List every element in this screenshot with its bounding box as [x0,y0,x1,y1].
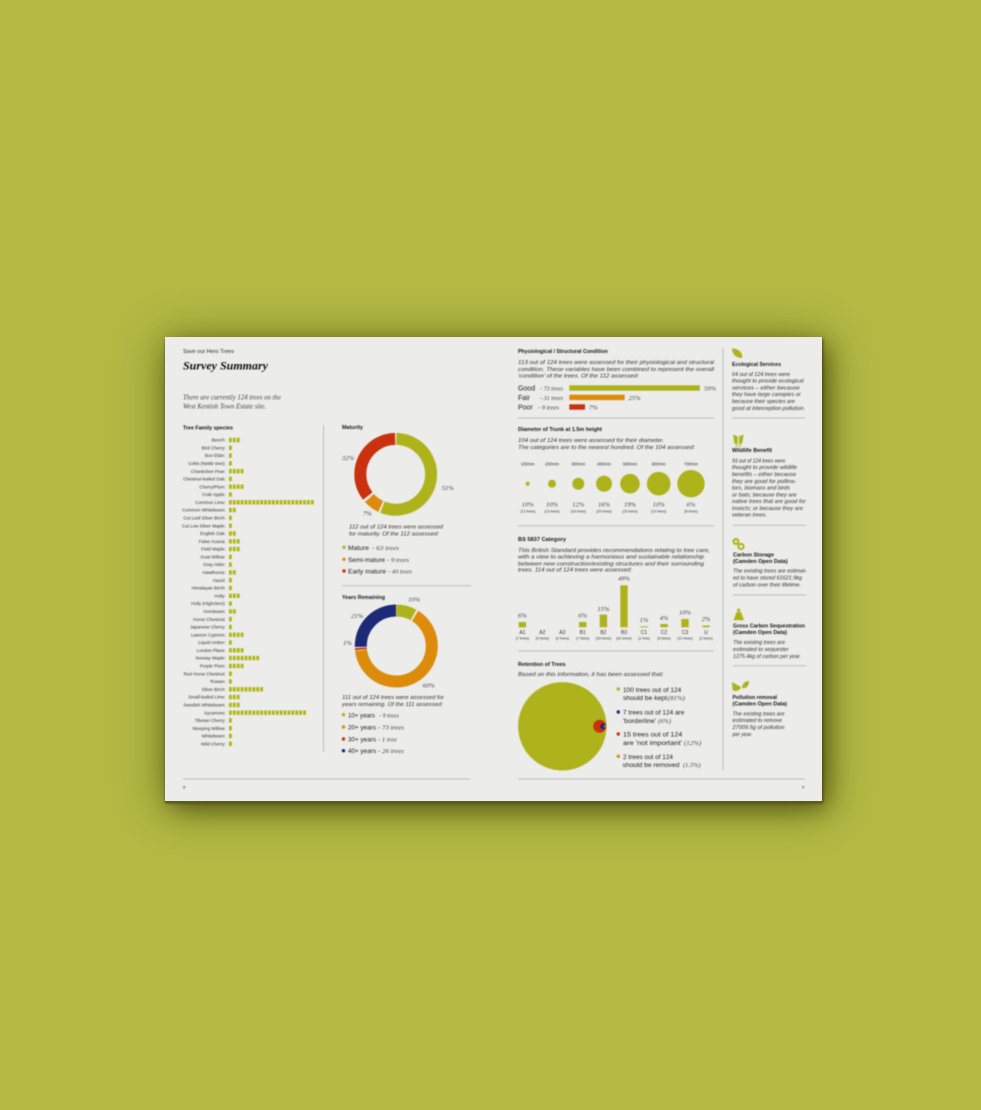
page number 9: 9 [802,784,805,790]
heading: Physiological / Structural Condition [518,349,608,355]
retention legend: should be kept [623,695,667,702]
species labels: Hornbeam: [203,609,226,614]
donut chart: maturity [360,439,431,510]
column chart: C1 [641,630,647,636]
years legend: - 9 trees [379,712,399,720]
kicker: Save our Hero Trees: Save our Hero Trees [183,349,234,355]
percentage labels: 7% [363,510,372,517]
column chart: B3 [621,630,627,636]
body text: they have large canopies or [732,392,801,398]
species labels: Sycamore: [204,710,226,715]
species labels: Hazel: [213,578,226,583]
maturity legend: - 63 trees [372,545,400,552]
sidebar: wildlife benefit [732,434,806,519]
column chart: (7 trees) [516,636,529,640]
species labels: Common Lime: [195,500,226,505]
panel: trunk diameter [518,427,705,514]
percentage labels: 32% [341,455,355,462]
years note: years remaining. Of the 111 assessed: [341,702,444,708]
bubble chart: 300mm [571,462,586,466]
panel: physiological condition [518,349,717,412]
column chart: 2% [702,616,711,623]
species labels: Celtis (Nettle tree): [188,461,226,466]
heading [732,695,787,708]
heading: Maturity: Maturity [342,425,363,431]
species labels: Crab Apple: [202,492,226,497]
percentage labels [341,455,454,517]
heading: Pollution removal [732,695,778,701]
maturity note: for maturity. Of the 112 assessed: [349,532,440,538]
page panel with drop shadow [164,337,822,801]
species labels [182,438,226,746]
species labels: Small-leafed Lime: [188,695,226,700]
column chart: 6% [578,613,588,620]
diameter note: 104 out of 124 trees were assessed for their diameter. [518,438,664,444]
percentage labels [343,596,435,690]
bubble chart: 200mm [545,462,559,466]
maturity note: 112 out of 124 trees were assessed [349,524,444,530]
column chart: (61 trees) [616,636,632,640]
icon: leaves and particles [732,681,749,691]
years legend: 10+ years [348,712,375,720]
column chart: (5 trees) [657,636,671,640]
condition bar chart: - 31 trees [540,395,563,402]
column chart: C3 [682,630,688,636]
maturity legend: Early mature [348,569,387,576]
heading: Years Remaining: Years Remaining [342,595,385,601]
body text: 1275.4kg of carbon per year. [733,654,801,660]
column chart: A3 [559,630,566,636]
column chart: (7 trees) [576,636,589,640]
body text: because their species are [732,399,795,405]
bubble chart: 19% [624,501,637,508]
percentage labels: 10% [408,596,421,604]
icon: leaf [732,348,742,358]
retention legend: are 'not important' [623,740,682,747]
column chart: (1 tree) [638,636,650,640]
body text: thought to provide wildlife [732,465,797,471]
maturity note [349,524,444,538]
species labels: Swedish Whitebeam: [183,702,226,708]
body text: veteran trees. [732,513,767,519]
bubble chart: (23 trees) [622,510,638,514]
column chart: A1 [519,630,526,636]
condition bar chart: - 9 trees [538,405,560,412]
condition bar chart: 59% [704,385,717,392]
heading: Retention of Trees [518,662,566,668]
column chart: U [704,630,708,636]
icon: weight [734,608,744,620]
bubble chart: 400mm [597,462,611,466]
BS note: between new construction/existing structures and their surrounding [518,561,704,567]
column chart: 49% [618,576,631,583]
retention legend: (81%) [668,695,685,702]
bubble chart: 600mm [652,462,666,466]
sidebar: pollution removal [731,681,787,738]
bubble chart: (12 trees) [520,510,535,514]
column chart: (0 trees) [536,636,549,640]
bubble chart: (20 trees) [596,510,612,514]
sidebar: ecological services [732,348,805,412]
maturity legend: - 40 trees [388,569,413,576]
years legend: 30+ years [348,736,376,744]
heading: Gross Carbon Sequestration [733,624,805,630]
heading: (Camden Open Data) [733,559,788,565]
BS note: This British Standard provides recommendations relating to tree care, [518,548,710,554]
species labels: Box Elder: [205,453,226,458]
column chart: 4% [660,615,669,622]
column chart: (16 trees) [596,636,611,640]
retention legend: 100 trees out of 124 [623,687,682,694]
heading [733,552,788,565]
species labels: Tibetan Cherry: [195,718,226,723]
heading: Tree Family species: Tree Family species [183,426,233,432]
condition bar chart: - 73 trees [540,385,563,392]
body text: or bats; because they are [732,492,797,498]
species labels: Silver Birch: [202,687,226,692]
percentage labels: 60% [423,682,435,690]
column chart: (12 trees) [677,636,693,640]
panel: maturity [341,425,454,576]
body text: 27009.5g of pollution [731,725,785,731]
body text: thought to provide ecological [732,379,805,385]
bubble chart: 10% [653,501,665,508]
species labels: Common Whitebeam: [182,508,226,513]
condition bar chart: 7% [589,405,598,412]
column chart: 6% [518,613,527,620]
condition note: condition. These variables have been combined to represent the overall [518,367,715,373]
retention legend: 15 trees out of 124 [623,732,683,739]
condition bar chart: 25% [628,395,641,402]
body text: they are good for pollina- [732,479,796,485]
heading: Carbon Storage [733,552,774,558]
retention legend: (6%) [658,718,671,725]
bubble chart: 12% [572,501,585,508]
body text [732,458,806,519]
condition bar chart: Fair [518,395,531,402]
species labels: Cut Leaf Silver Birch: [183,516,226,520]
panel: BS 5837 category [516,537,713,640]
bubble chart: 10% [522,501,534,508]
species labels: Horse Chestnut: [193,617,226,622]
column chart: 15% [597,606,610,613]
heading: (Camden Open Data) [733,630,787,636]
species labels: Chestnut-leafed Oak: [183,476,226,482]
page number 8: 8 [183,784,186,790]
years note: 111 out of 124 trees were assessed for [342,695,444,701]
sidebar: carbon storage [733,539,807,588]
years legend: 20+ years [348,724,376,732]
percentage labels: 1% [343,640,352,647]
species labels: Japanese Cherry: [190,625,226,630]
species labels: Rowan: [210,679,226,684]
species labels: Chanticleer Pear: [191,469,226,474]
heading [733,624,805,636]
body text: insects; or because they are [732,506,803,512]
body text: per year. [732,732,752,738]
column chart: (2 trees) [699,636,713,640]
report spread content [182,348,807,790]
bubble chart: (8 trees) [684,510,698,514]
body text: estimated to sequester [733,647,789,653]
years legend [342,712,405,755]
years note [341,695,444,708]
condition note [518,360,715,380]
species labels: Liquid Amber: [198,640,226,645]
heading: Diameter of Trunk at 1.5m height [518,427,602,433]
species labels: Norway Maple: [196,656,226,661]
species labels: Bird Cherry: [202,445,226,450]
maturity legend [342,545,413,576]
condition bar chart [518,385,717,412]
heading: (Camden Open Data) [732,702,787,708]
condition bar chart: Good [518,385,535,392]
percentage labels: 51% [442,485,454,492]
proportional circles [518,682,606,770]
column chart [516,576,713,640]
condition note: 'condition' of the trees. Of the 112 assessed: [518,374,640,380]
species labels: Cut Low Silver Maple: [182,523,226,528]
intro text: There are currently 124 trees on the [183,394,281,401]
species labels: London Plane: [197,648,226,653]
species labels: Red Horse Chestnut: [184,671,226,676]
years legend: - 73 trees [378,724,405,732]
heading: Wildlife Benefit [732,448,772,454]
body text: native trees that are good for [732,499,806,505]
title: Survey Summary [183,358,269,372]
species labels: Field Maple: [201,547,226,552]
icon: carbon pills [734,539,744,549]
species labels: English Oak: [200,531,226,536]
column chart: A2 [539,630,546,636]
years legend: - 26 trees [378,748,405,755]
retention legend [617,687,701,769]
percentage labels: 21% [351,613,364,620]
retention note: Based on this information, it has been assessed that: [518,672,664,678]
body text [732,372,805,412]
column chart: 1% [640,617,649,624]
bubble chart: 10% [546,501,559,508]
body text: good at interception pollution. [732,406,805,412]
tree species pictogram chart [182,438,315,746]
species labels: Whitebeam: [202,734,226,739]
species labels: Hawthorne: [203,570,226,575]
bubble chart: 500mm [623,462,637,466]
BS note: trees. 114 out of 124 trees were assessed: [518,568,633,574]
body text [733,568,807,588]
retention legend: 'borderline' [623,718,656,725]
diameter note: The categories are to the nearest hundred. Of the 104 assessed: [518,445,696,451]
species labels: Holly: [214,593,226,598]
body text: The existing trees are estimat- [733,568,807,574]
donut chart: years remaining [361,610,432,682]
body text: The existing trees are [733,640,785,646]
intro text [183,394,281,411]
body text: services – either because [732,386,800,392]
body text: tors, biomass and birds [732,486,790,492]
sidebar: gross carbon sequestration [733,608,805,660]
species labels: False Acacia: [199,539,226,544]
column chart: B2 [600,630,607,636]
BS note [518,548,710,574]
heading: BS 5837 Category [518,537,566,543]
body text: 93 out of 124 trees were [732,458,785,464]
column chart: B1 [580,630,586,636]
column chart: 10% [679,610,692,617]
retention legend: (1.5%) [683,762,701,769]
bubble chart: (13 trees) [651,510,666,514]
years legend: 40+ years [348,748,376,755]
body text [733,640,801,660]
years legend: - 1 tree [378,736,397,744]
body text: 64 out of 124 trees were [732,372,790,378]
body text [731,712,785,738]
species labels: Purple Plum: [200,664,226,668]
species labels: Wild Cherry: [201,741,226,746]
species labels: Goat Willow: [200,554,226,560]
body text: The existing trees are [732,712,785,718]
tree count icons [229,440,315,744]
species labels: Gray Alder: [203,562,226,567]
bubble chart: (13 trees) [544,510,560,514]
panel: years remaining [341,595,444,755]
species labels: Cherry/Plum: [199,484,226,489]
species labels: Himalayan Birch: [192,586,226,591]
bubble chart [520,462,705,514]
condition bar chart: Poor [518,405,533,412]
retention legend: should be removed [622,762,680,769]
body text: ed to have stored 61621.9kg [733,576,802,582]
column chart: C2 [661,630,667,636]
heading: Ecological Services [732,362,781,368]
bubble chart: 700mm [684,462,698,466]
column chart: (0 trees) [556,636,569,640]
maturity legend: Mature [348,545,370,552]
body text: of carbon over their lifetime. [733,582,801,588]
diameter note [518,438,696,451]
condition note: 113 out of 124 trees were assessed for their physiological and structural [518,360,715,366]
bubble chart: 100mm [521,462,535,466]
BS note: with a view to achieving a harmonious and sustainable relationship [518,554,704,560]
bubble chart: 16% [598,501,611,508]
retention legend: 7 trees out of 124 are [623,710,685,716]
intro text: West Kentish Town Estate site. [183,404,266,411]
body text: benefits – either because [732,472,796,478]
bubble chart: (15 trees) [571,510,586,514]
species labels: Weeping Willow: [193,726,226,731]
species labels: Holly (Highclere): [191,601,226,606]
maturity legend: - 9 trees [387,557,410,564]
species labels: Lawson Cypress: [191,632,226,637]
maturity legend: Semi-mature [348,557,386,564]
species labels: Beech: [212,438,226,443]
body text: estimated to remove [732,718,782,724]
retention legend: 2 trees out of 124 [623,754,674,761]
retention legend: (12%) [684,740,701,747]
icon: butterfly [733,434,744,448]
panel: retention of trees [518,662,701,770]
bubble chart: 6% [687,501,696,508]
